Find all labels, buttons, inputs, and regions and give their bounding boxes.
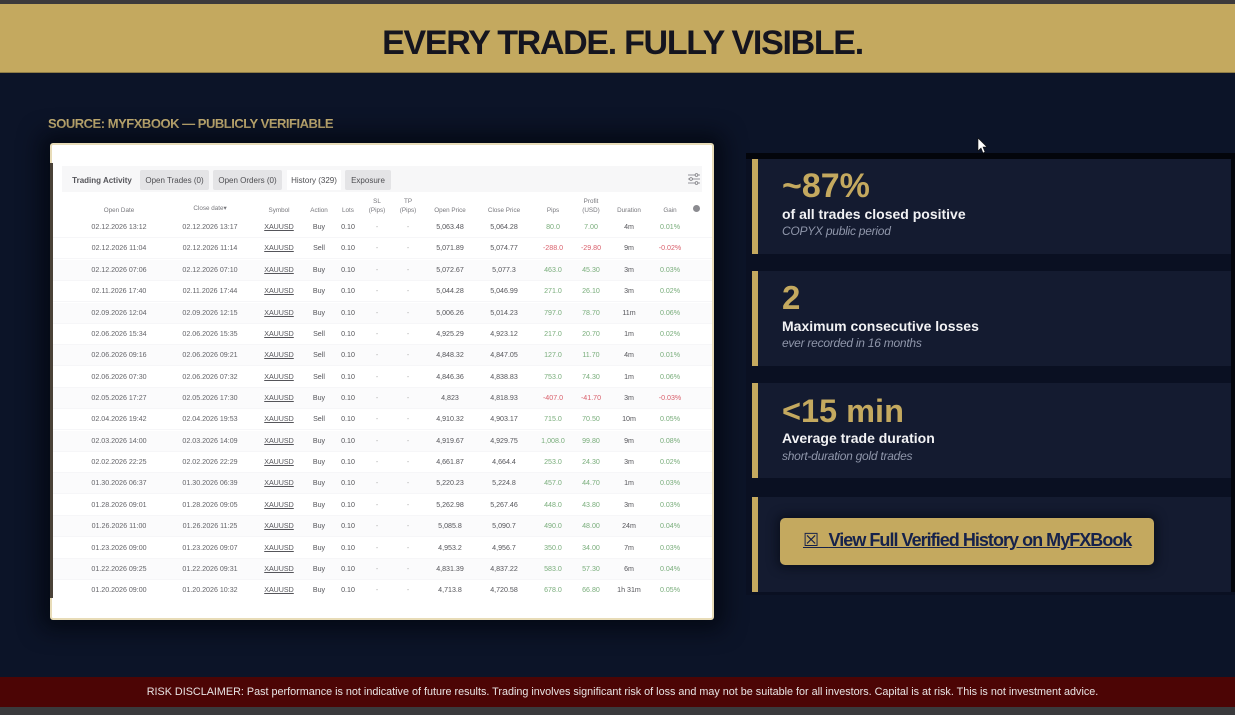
table rows: 02.02.2026 22:29 xyxy=(182,458,238,466)
table rows: - xyxy=(407,351,409,359)
table rows: 0.03% xyxy=(660,544,680,552)
table rows: 02.03.2026 14:00 xyxy=(91,437,147,445)
table rows: 4,720.58 xyxy=(490,586,518,594)
table rows: 0.10 xyxy=(341,266,355,274)
table rows: XAUUSD xyxy=(264,479,294,487)
table rows: - xyxy=(407,309,409,317)
table rows: 0.10 xyxy=(341,586,355,594)
table rows: 4,847.05 xyxy=(490,351,518,359)
table rows: 5,071.89 xyxy=(436,244,464,252)
table rows: 01.28.2026 09:01 xyxy=(91,501,147,509)
table rows: 0.10 xyxy=(341,437,355,445)
table rows: - xyxy=(407,373,409,381)
table rows: 01.26.2026 11:00 xyxy=(92,522,146,530)
table rows: 490.0 xyxy=(544,522,562,530)
table rows xyxy=(53,223,712,594)
table header: Open Date xyxy=(104,207,134,214)
table header: Action xyxy=(310,207,328,214)
table rows: - xyxy=(376,458,378,466)
table header: Duration xyxy=(617,207,641,214)
table rows: 3m xyxy=(624,458,634,466)
stat card: win rate: of all trades closed positive xyxy=(782,206,966,222)
table rows: 753.0 xyxy=(544,373,562,381)
table rows: 0.02% xyxy=(660,330,680,338)
table rows: 253.0 xyxy=(544,458,562,466)
table rows: 5,006.26 xyxy=(436,309,464,317)
table rows: - xyxy=(376,437,378,445)
table header: Lots xyxy=(342,207,354,214)
table rows: 5,063.48 xyxy=(436,223,464,231)
table rows: Sell xyxy=(313,330,325,338)
source heading: SOURCE: MYFXBOOK — PUBLICLY VERIFIABLE xyxy=(48,116,333,131)
table rows: 78.70 xyxy=(582,309,600,317)
table rows: 127.0 xyxy=(544,351,562,359)
table header: Pips xyxy=(547,207,559,214)
table rows: 11.70 xyxy=(582,351,600,359)
table rows: 4,903.17 xyxy=(490,415,518,423)
table rows: -288.0 xyxy=(543,244,563,252)
table rows: 0.10 xyxy=(341,522,355,530)
table rows: 4,910.32 xyxy=(436,415,464,423)
table rows: 02.11.2026 17:40 xyxy=(92,287,146,295)
table rows: Buy xyxy=(313,394,325,402)
table rows: 0.04% xyxy=(660,522,680,530)
table rows: 0.04% xyxy=(660,565,680,573)
table rows: Buy xyxy=(313,287,325,295)
table rows: 0.05% xyxy=(660,415,680,423)
table rows: 0.06% xyxy=(660,373,680,381)
stat card: consecutive losses xyxy=(752,271,1231,366)
table rows: - xyxy=(376,479,378,487)
table rows: 0.01% xyxy=(660,223,680,231)
table rows: 02.06.2026 15:35 xyxy=(182,330,238,338)
table rows: Sell xyxy=(313,415,325,423)
table rows: 0.10 xyxy=(341,565,355,573)
table rows: - xyxy=(407,586,409,594)
table rows: 5,224.8 xyxy=(492,479,516,487)
table rows: 350.0 xyxy=(544,544,562,552)
table rows: - xyxy=(376,415,378,423)
table rows: 0.10 xyxy=(341,223,355,231)
table rows: 02.03.2026 14:09 xyxy=(182,437,238,445)
table rows: 678.0 xyxy=(544,586,562,594)
table rows: Buy xyxy=(313,501,325,509)
table rows: 0.10 xyxy=(341,244,355,252)
table rows: XAUUSD xyxy=(264,501,294,509)
table rows: Buy xyxy=(313,479,325,487)
table rows: 74.30 xyxy=(582,373,600,381)
table rows: - xyxy=(376,309,378,317)
table rows: 457.0 xyxy=(544,479,562,487)
stat card: consecutive losses: Maximum consecutive losses xyxy=(782,318,979,334)
table rows: 5,220.23 xyxy=(436,479,464,487)
table rows: 70.50 xyxy=(582,415,600,423)
table rows: 0.10 xyxy=(341,394,355,402)
icon: mouse cursor xyxy=(978,138,988,153)
table rows: XAUUSD xyxy=(264,415,294,423)
table rows: 4,661.87 xyxy=(436,458,464,466)
table rows: 715.0 xyxy=(544,415,562,423)
table header: Close Price xyxy=(488,207,520,214)
table rows: 448.0 xyxy=(544,501,562,509)
stat card: trade duration: short-duration gold trades xyxy=(782,449,912,463)
table rows: 24.30 xyxy=(582,458,600,466)
table rows: 0.03% xyxy=(660,266,680,274)
table rows: 02.11.2026 17:44 xyxy=(183,287,237,295)
header banner xyxy=(0,4,1235,73)
table header: TP xyxy=(404,198,412,205)
table rows: Buy xyxy=(313,522,325,530)
table rows: Buy xyxy=(313,565,325,573)
table rows: 583.0 xyxy=(544,565,562,573)
table rows: 02.06.2026 07:30 xyxy=(91,373,147,381)
tab bar: Trading Activity xyxy=(72,176,132,185)
stat card: trade duration: <15 min xyxy=(782,393,904,429)
table rows: 5,267.46 xyxy=(490,501,518,509)
risk disclaimer: RISK DISCLAIMER: Past performance is not indicative of future results. Trading involves significant risk of loss and may not be suitable for all investors. Capital is at risk. This is not investment advice. xyxy=(147,686,1098,698)
table rows: 1m xyxy=(624,373,634,381)
table rows: Sell xyxy=(313,244,325,252)
table rows: 4,823 xyxy=(441,394,459,402)
table rows: 01.22.2026 09:31 xyxy=(182,565,238,573)
table rows: 01.23.2026 09:07 xyxy=(182,544,238,552)
table rows: - xyxy=(376,287,378,295)
table rows: 0.10 xyxy=(341,544,355,552)
table rows: - xyxy=(376,501,378,509)
table rows: - xyxy=(407,266,409,274)
table rows: 10m xyxy=(622,415,636,423)
table rows: XAUUSD xyxy=(264,522,294,530)
table rows: 271.0 xyxy=(544,287,562,295)
table rows: 1h 31m xyxy=(617,586,641,594)
table rows: - xyxy=(376,223,378,231)
table rows: - xyxy=(407,501,409,509)
table rows: XAUUSD xyxy=(264,373,294,381)
table rows: 02.06.2026 07:32 xyxy=(182,373,238,381)
table rows: 6m xyxy=(624,565,634,573)
table rows: 11m xyxy=(622,309,636,317)
table header: SL xyxy=(373,198,381,205)
table rows: 0.05% xyxy=(660,586,680,594)
table rows: 01.30.2026 06:37 xyxy=(91,479,147,487)
table rows: 02.05.2026 17:27 xyxy=(91,394,147,402)
table rows: Buy xyxy=(313,458,325,466)
table rows: -41.70 xyxy=(581,394,601,402)
table rows: - xyxy=(407,287,409,295)
table rows: 02.12.2026 13:12 xyxy=(91,223,147,231)
table rows: 0.01% xyxy=(660,351,680,359)
table rows: 4,925.29 xyxy=(436,330,464,338)
table rows: 463.0 xyxy=(544,266,562,274)
table rows: 02.06.2026 15:34 xyxy=(91,330,147,338)
table rows: - xyxy=(376,544,378,552)
table rows: 3m xyxy=(624,394,634,402)
table rows: XAUUSD xyxy=(264,223,294,231)
table rows: 3m xyxy=(624,287,634,295)
stat card: win rate: COPYX public period xyxy=(782,224,891,238)
table rows: 24m xyxy=(622,522,636,530)
tab bar: History (329) xyxy=(291,176,337,185)
table rows: XAUUSD xyxy=(264,586,294,594)
table header: (USD) xyxy=(582,207,600,214)
card: call to action xyxy=(752,497,1231,592)
table header xyxy=(104,198,700,214)
table rows: 5,072.67 xyxy=(436,266,464,274)
table rows: - xyxy=(376,565,378,573)
table rows: 4,838.83 xyxy=(490,373,518,381)
stat card: trade duration: Average trade duration xyxy=(782,430,935,446)
table rows: 1,008.0 xyxy=(541,437,565,445)
table rows: 7.00 xyxy=(584,223,598,231)
table rows: 4,664.4 xyxy=(492,458,516,466)
table rows: 02.04.2026 19:42 xyxy=(91,415,147,423)
table rows: 4,919.67 xyxy=(436,437,464,445)
title: EVERY TRADE. FULLY VISIBLE. xyxy=(382,24,863,62)
table rows: Buy xyxy=(313,223,325,231)
table rows: 0.10 xyxy=(341,458,355,466)
table rows: 26.10 xyxy=(582,287,600,295)
table rows: 43.80 xyxy=(582,501,600,509)
table rows: 0.03% xyxy=(660,479,680,487)
table rows: 01.26.2026 11:25 xyxy=(183,522,237,530)
table rows: -29.80 xyxy=(581,244,601,252)
stat card: consecutive losses: 2 xyxy=(782,279,800,316)
table header: Symbol xyxy=(268,207,290,214)
table rows: 4,837.22 xyxy=(490,565,518,573)
table rows: 4,713.8 xyxy=(438,586,462,594)
table rows: 0.10 xyxy=(341,501,355,509)
table rows: - xyxy=(407,415,409,423)
table rows: - xyxy=(376,394,378,402)
table header: Profit xyxy=(584,198,598,205)
table rows: XAUUSD xyxy=(264,458,294,466)
table rows: 0.06% xyxy=(660,309,680,317)
tab bar xyxy=(62,166,702,192)
tab bar: Exposure xyxy=(351,176,385,185)
table rows: -0.03% xyxy=(659,394,681,402)
table rows: - xyxy=(376,522,378,530)
stat card: trade duration xyxy=(752,383,1231,478)
table rows: 9m xyxy=(624,437,634,445)
table rows: 02.04.2026 19:53 xyxy=(182,415,238,423)
table rows: 5,085.8 xyxy=(438,522,462,530)
table rows: 99.80 xyxy=(582,437,600,445)
panel: MyFXBook trade history screenshot xyxy=(50,143,714,620)
table rows: 02.06.2026 09:16 xyxy=(91,351,147,359)
table rows: - xyxy=(407,522,409,530)
table rows: 0.10 xyxy=(341,415,355,423)
tab bar: Open Orders (0) xyxy=(218,176,277,185)
table rows: 01.28.2026 09:05 xyxy=(182,501,238,509)
table rows: -407.0 xyxy=(543,394,563,402)
table rows: XAUUSD xyxy=(264,287,294,295)
table rows: 01.23.2026 09:00 xyxy=(91,544,147,552)
table rows: 0.10 xyxy=(341,351,355,359)
table rows: - xyxy=(407,244,409,252)
table rows: - xyxy=(407,458,409,466)
table rows: Buy xyxy=(313,266,325,274)
table rows: 66.80 xyxy=(582,586,600,594)
table rows: 02.09.2026 12:15 xyxy=(182,309,238,317)
table rows: 02.05.2026 17:30 xyxy=(182,394,238,402)
table rows: 0.10 xyxy=(341,309,355,317)
table rows: XAUUSD xyxy=(264,309,294,317)
table rows: 57.30 xyxy=(582,565,600,573)
table rows: - xyxy=(376,244,378,252)
table rows: XAUUSD xyxy=(264,266,294,274)
table header: Close date▾ xyxy=(193,205,227,212)
table rows: XAUUSD xyxy=(264,330,294,338)
table rows: 01.20.2026 09:00 xyxy=(91,586,147,594)
table rows: 02.12.2026 11:14 xyxy=(183,244,237,252)
table rows: 3m xyxy=(624,501,634,509)
table rows: 4,846.36 xyxy=(436,373,464,381)
table rows: - xyxy=(407,479,409,487)
table rows: - xyxy=(376,330,378,338)
table rows: 5,014.23 xyxy=(490,309,518,317)
table rows: XAUUSD xyxy=(264,544,294,552)
table header: (Pips) xyxy=(400,207,416,214)
table rows: 4m xyxy=(624,351,634,359)
table rows: 1m xyxy=(624,479,634,487)
table rows: 1m xyxy=(624,330,634,338)
table rows: XAUUSD xyxy=(264,437,294,445)
table rows: 0.02% xyxy=(660,458,680,466)
table rows: 9m xyxy=(624,244,634,252)
table rows: Buy xyxy=(313,309,325,317)
table rows: 80.0 xyxy=(546,223,560,231)
table rows: 0.10 xyxy=(341,479,355,487)
table rows: - xyxy=(376,351,378,359)
table rows: 3m xyxy=(624,266,634,274)
stat card: win rate: ~87% xyxy=(782,167,870,205)
table rows: 01.22.2026 09:25 xyxy=(91,565,147,573)
table header: (Pips) xyxy=(369,207,385,214)
table rows: 02.09.2026 12:04 xyxy=(91,309,147,317)
table rows: 02.06.2026 09:21 xyxy=(182,351,238,359)
table header: Open Price xyxy=(434,207,466,214)
table rows: - xyxy=(407,394,409,402)
table rows: - xyxy=(407,330,409,338)
table rows: 0.03% xyxy=(660,501,680,509)
table rows: 797.0 xyxy=(544,309,562,317)
table rows: Buy xyxy=(313,437,325,445)
table rows: 4,956.7 xyxy=(492,544,516,552)
table rows: 5,064.28 xyxy=(490,223,518,231)
table rows: 7m xyxy=(624,544,634,552)
table rows: - xyxy=(407,544,409,552)
table rows: 02.02.2026 22:25 xyxy=(91,458,147,466)
table rows: 02.12.2026 11:04 xyxy=(92,244,146,252)
table rows: 02.12.2026 07:10 xyxy=(182,266,238,274)
table rows: 5,077.3 xyxy=(492,266,516,274)
table rows: 0.08% xyxy=(660,437,680,445)
table rows: 4,848.32 xyxy=(436,351,464,359)
table rows: 44.70 xyxy=(582,479,600,487)
table rows: - xyxy=(407,223,409,231)
table rows: 4,929.75 xyxy=(490,437,518,445)
table rows: 4m xyxy=(624,223,634,231)
table rows: 5,090.7 xyxy=(492,522,516,530)
table rows: 217.0 xyxy=(544,330,562,338)
table rows: 5,046.99 xyxy=(490,287,518,295)
table header: Gain xyxy=(663,207,677,214)
table rows: 4,818.93 xyxy=(490,394,518,402)
stat card: consecutive losses: ever recorded in 16 months xyxy=(782,336,922,350)
stat card: win rate xyxy=(752,159,1231,254)
table rows: 5,262.98 xyxy=(436,501,464,509)
table rows: Sell xyxy=(313,373,325,381)
table rows: XAUUSD xyxy=(264,394,294,402)
table rows: 02.12.2026 07:06 xyxy=(91,266,147,274)
table rows: 4,923.12 xyxy=(490,330,518,338)
table rows: 01.30.2026 06:39 xyxy=(182,479,238,487)
table rows: - xyxy=(376,266,378,274)
tab bar: Open Trades (0) xyxy=(145,176,204,185)
button: view verified history: ☒ View Full Verified History on MyFXBook xyxy=(803,530,1131,550)
table rows: - xyxy=(376,586,378,594)
table rows: XAUUSD xyxy=(264,351,294,359)
table rows: Sell xyxy=(313,351,325,359)
table rows: - xyxy=(376,373,378,381)
table rows: 45.30 xyxy=(582,266,600,274)
table rows: 0.10 xyxy=(341,330,355,338)
table rows: 4,831.39 xyxy=(436,565,464,573)
table rows: 01.20.2026 10:32 xyxy=(182,586,238,594)
table rows: 34.00 xyxy=(582,544,600,552)
table rows: 0.02% xyxy=(660,287,680,295)
button: view verified history xyxy=(780,518,1154,565)
table rows: - xyxy=(407,565,409,573)
table rows: 5,044.28 xyxy=(436,287,464,295)
table rows: Buy xyxy=(313,586,325,594)
table rows: Buy xyxy=(313,544,325,552)
table rows: XAUUSD xyxy=(264,244,294,252)
table rows: 02.12.2026 13:17 xyxy=(182,223,238,231)
icon: filter sliders xyxy=(688,173,700,185)
table rows: 0.10 xyxy=(341,287,355,295)
table rows: - xyxy=(407,437,409,445)
table rows: 20.70 xyxy=(582,330,600,338)
table rows: 4,953.2 xyxy=(438,544,462,552)
table rows: -0.02% xyxy=(659,244,681,252)
table rows: 5,074.77 xyxy=(490,244,518,252)
table rows: 0.10 xyxy=(341,373,355,381)
table rows: 48.00 xyxy=(582,522,600,530)
table rows: XAUUSD xyxy=(264,565,294,573)
